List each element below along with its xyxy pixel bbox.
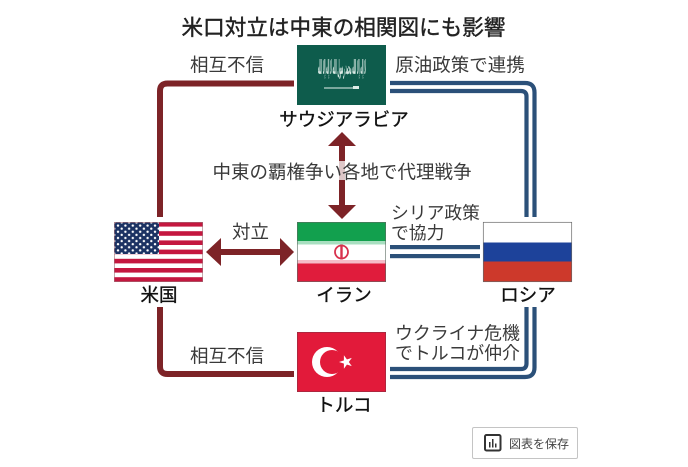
button: save chart [472, 428, 578, 458]
flag: Saudi Arabia [297, 45, 386, 105]
flag: Turkey [297, 332, 386, 392]
label: Russia: ロシア [500, 284, 556, 306]
label: oil policy cooperation: 原油政策で連携 [395, 54, 525, 76]
button: save chart: 図表を保存 [509, 437, 569, 451]
connector: Turkey to Russia (Ukraine crisis) [390, 307, 534, 377]
label: Syria policy cooperation: で協力 [391, 223, 444, 243]
connector: USA to Turkey (mutual distrust) [160, 307, 294, 374]
flag: USA [114, 222, 203, 282]
label: Ukraine crisis mediation: ウクライナ危機 [395, 324, 520, 344]
label: Turkey: トルコ [316, 394, 372, 416]
label: confrontation: 対立 [232, 222, 269, 242]
label: mutual distrust, top: 相互不信 [190, 54, 264, 76]
label: USA: 米国 [140, 284, 178, 306]
label: Saudi Arabia: サウジアラビア [279, 109, 409, 130]
title: 米口対立は中東の相関図にも影響 [182, 15, 505, 40]
label: proxy war callout: 中東の覇権争い各地で代理戦争 [212, 162, 472, 182]
icon: bar chart [485, 435, 500, 450]
connector: Saudi Arabia to Russia (oil policy) [390, 83, 534, 217]
connector: Iran to Russia (Syria policy) [390, 245, 480, 258]
label: Ukraine crisis mediation: でトルコが仲介 [395, 344, 520, 364]
label: Iran: イラン [316, 284, 372, 306]
label: Syria policy cooperation: シリア政策 [391, 203, 480, 223]
flag: Iran [297, 222, 386, 282]
connector: USA to Saudi Arabia (mutual distrust) [160, 84, 294, 217]
label: mutual distrust, bottom: 相互不信 [190, 346, 264, 366]
flag: Russia [483, 222, 572, 282]
arrow: USA to Iran [206, 238, 294, 266]
arrow: Saudi Arabia to Iran [328, 132, 356, 219]
